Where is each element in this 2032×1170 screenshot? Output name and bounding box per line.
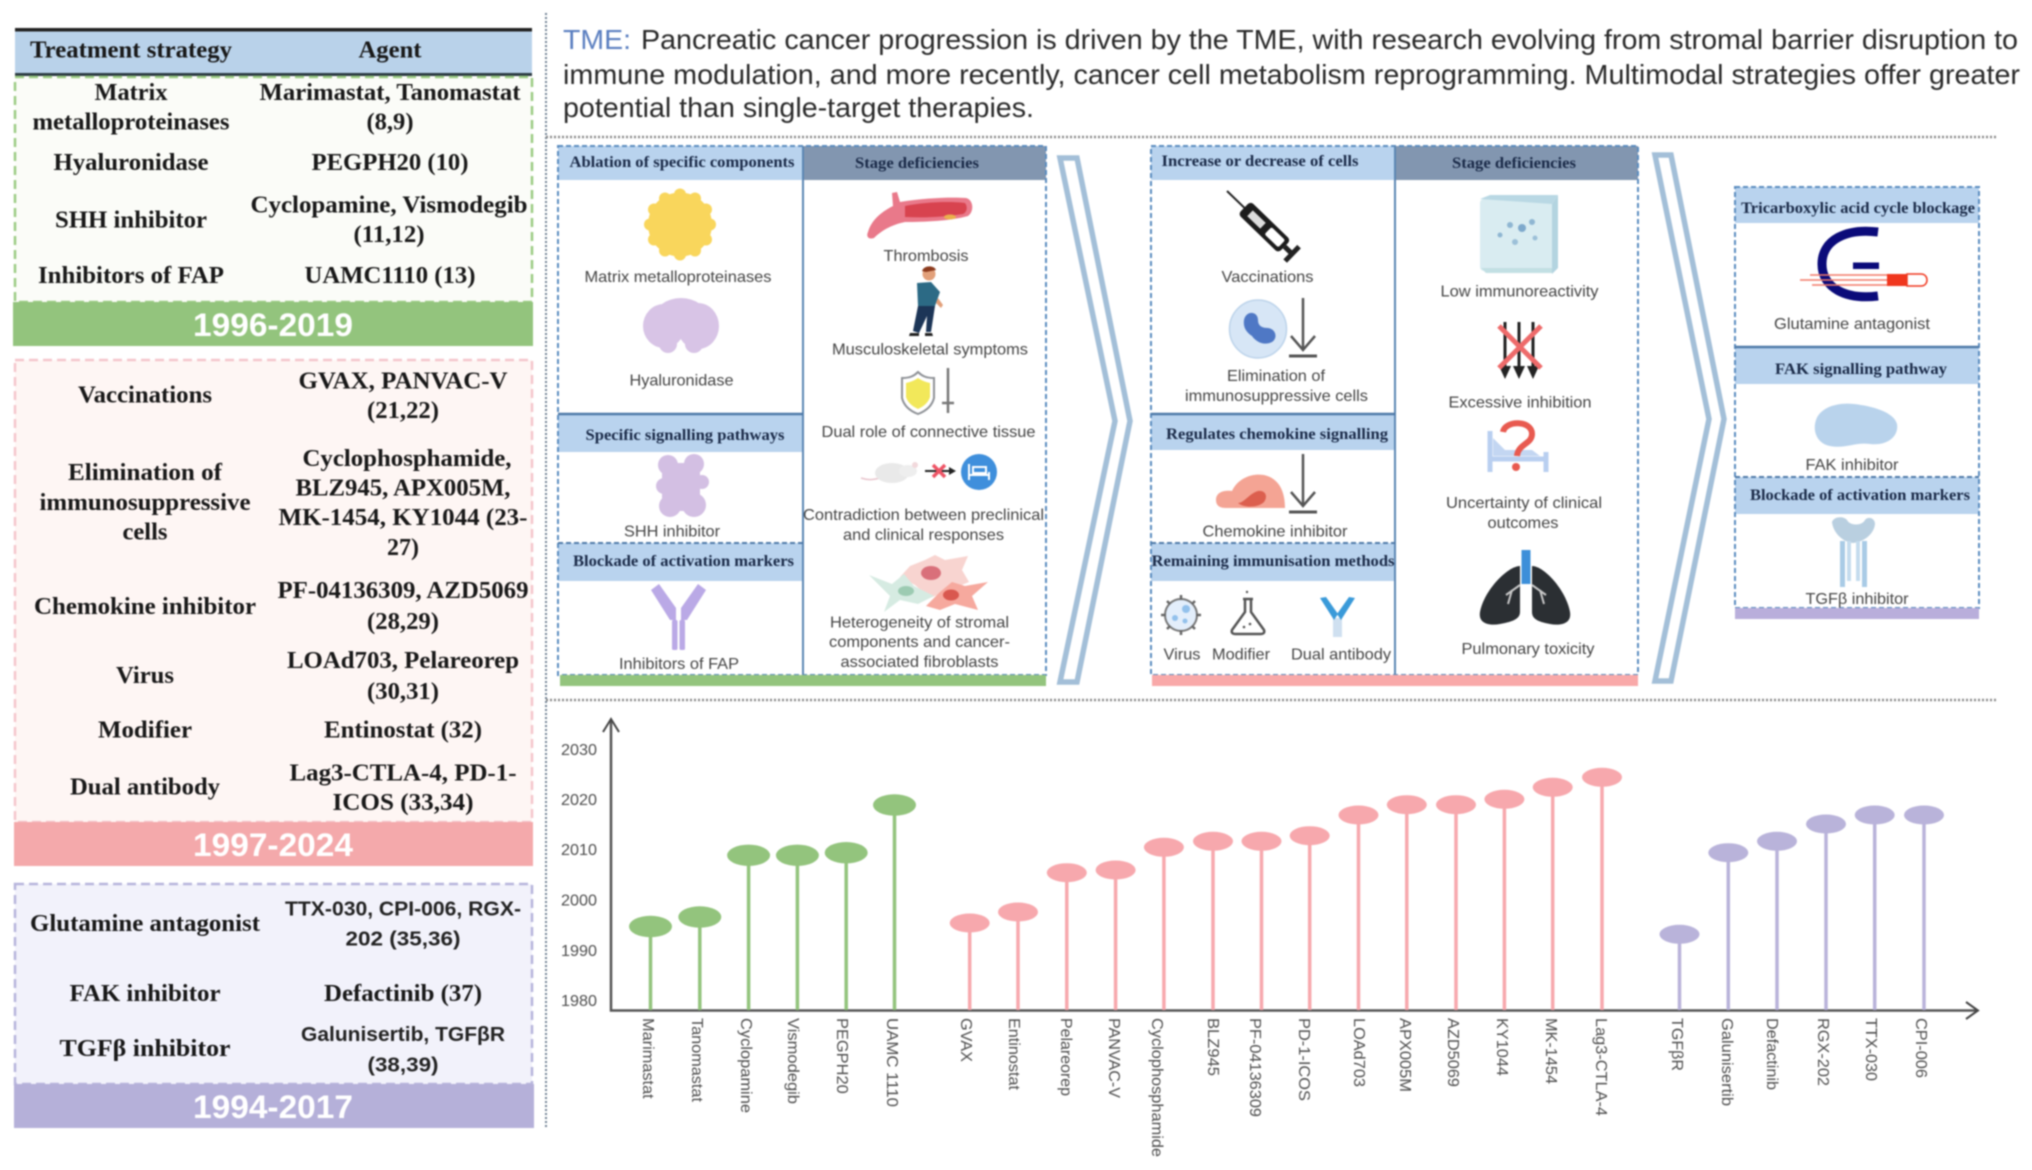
label: elimination of immunosuppressive cells: Elimination of — [1227, 368, 1326, 385]
header: increase or decrease of cells — [1151, 146, 1395, 180]
header: blockade of activation markers — [1735, 477, 1979, 514]
label: musculoskeletal symptoms: Musculoskeletal symptoms — [832, 342, 1028, 358]
panel: immune strategies 1997-2024: BLZ945, APX005M, — [296, 474, 510, 502]
label: elimination of immunosuppressive cells — [1185, 368, 1368, 405]
icon: man with musculoskeletal pain — [909, 266, 943, 336]
drug name labels: PF-04136309 — [1246, 1018, 1263, 1117]
label: elimination of immunosuppressive cells: immunosuppressive cells — [1185, 388, 1368, 405]
era bar 1996-2019 — [13, 302, 533, 346]
icon: shield and sword — [902, 368, 954, 414]
drug name labels: MK-1454 — [1542, 1018, 1559, 1084]
icon: virus — [1161, 595, 1201, 635]
table header: Treatment strategy — [30, 36, 233, 64]
panel: immune strategies 1997-2024: GVAX, PANVAC-V — [298, 368, 508, 394]
drug name labels: PANVAC-V — [1105, 1018, 1122, 1099]
header: stage deficiencies — [804, 146, 1046, 180]
panel: immune strategies 1997-2024: Cyclophosphamide, — [302, 445, 512, 472]
panel: metabolic strategies 1994-2017: TGFβ inhibitor — [60, 1035, 231, 1062]
icon: ice cube — [1480, 195, 1558, 274]
year axis labels: 1990 — [561, 943, 597, 960]
label: dual role of connective tissue: Dual role of connective tissue — [822, 424, 1036, 441]
panel: immune strategies 1997-2024: (28,29) — [367, 608, 439, 635]
header: tricarboxylic acid cycle blockage — [1735, 187, 1979, 223]
label: chemokine inhibitor: Chemokine inhibitor — [1202, 524, 1348, 540]
label: FAK inhibitor: FAK inhibitor — [1806, 457, 1899, 474]
label: uncertainty of clinical outcomes: outcomes — [1488, 515, 1558, 532]
drug name labels: RGX-202 — [1814, 1018, 1831, 1086]
panel: metabolic strategies 1994-2017: FAK inhibitor — [70, 980, 221, 1007]
icon: mouse to patient contradiction — [861, 454, 997, 490]
panel: immune strategies 1997-2024: 27) — [387, 534, 419, 561]
header: ablation of specific components: Ablation of specific components — [570, 154, 794, 171]
panel: immune strategies 1997-2024: Modifier — [98, 716, 192, 744]
era bar 1994-2017 — [14, 1084, 534, 1128]
era bar 1997-2024 — [14, 822, 533, 866]
panel: immune strategies 1997-2024: Elimination of — [68, 459, 223, 486]
panel: immune strategies 1997-2024: immunosuppressive — [40, 489, 251, 516]
panel: metabolic strategies 1994-2017: Defactinib (37) — [324, 980, 482, 1007]
panel: stromal strategies 1996-2019: (8,9) — [366, 108, 414, 136]
TME summary text: potential than single-target therapies. — [563, 92, 1034, 123]
drug name labels: UAMC 1110 — [883, 1018, 900, 1107]
label: glutamine antagonist: Glutamine antagonist — [1774, 316, 1931, 333]
drug name labels: Lag3-CTLA-4 — [1592, 1018, 1609, 1116]
header: blockade of activation markers: Blockade of activation markers — [573, 553, 794, 570]
panel: metabolic strategies 1994-2017: Glutamine antagonist — [30, 910, 261, 937]
header: specific signalling pathways: Specific signalling pathways — [586, 427, 784, 444]
header: stage deficiencies: Stage deficiencies — [855, 155, 979, 172]
table header — [15, 28, 532, 76]
panel: immune modulation stage — [1151, 146, 1638, 675]
panel: stromal strategies 1996-2019: Hyaluronidase — [54, 149, 209, 176]
label: matrix metalloproteinases: Matrix metalloproteinases — [584, 269, 772, 286]
drug name labels: PD-1-ICOS — [1295, 1018, 1312, 1101]
panel: metabolism stage — [1735, 187, 1979, 608]
header: blockade of activation markers — [558, 543, 803, 581]
TME summary text: immune modulation, and more recently, cancer cell metabolism reprogramming. Multimodal strategies offer greater — [563, 59, 2020, 90]
panel: stromal strategies 1996-2019: Inhibitors of FAP — [38, 262, 224, 289]
panel: metabolic strategies 1994-2017: Galunisertib, TGFβR — [301, 1024, 506, 1046]
panel: stromal strategies 1996-2019: Matrix — [94, 79, 168, 106]
drug name labels: GVAX — [957, 1018, 974, 1063]
header: FAK signalling pathway: FAK signalling pathway — [1775, 361, 1947, 378]
TME summary text: TME: — [563, 24, 631, 55]
year axis labels: 1980 — [561, 993, 597, 1010]
drug name labels — [639, 1018, 1929, 1157]
drug name labels: Tanomastat — [688, 1018, 705, 1103]
drug name labels: Pelareorep — [1057, 1018, 1074, 1096]
header: specific signalling pathways — [558, 414, 803, 452]
panel: immune strategies 1997-2024: (30,31) — [367, 678, 439, 705]
label: uncertainty of clinical outcomes — [1446, 495, 1602, 532]
label: uncertainty of clinical outcomes: Uncertainty of clinical — [1446, 495, 1602, 512]
label: modifier: Modifier — [1212, 646, 1271, 664]
header: blockade of activation markers: Blockade of activation markers — [1750, 487, 1970, 504]
label: TGF-beta inhibitor: TGFβ inhibitor — [1806, 591, 1909, 608]
panel: stromal strategies 1996-2019: Marimastat, Tanomastat — [260, 79, 521, 106]
drug name labels: Galunisertib — [1718, 1018, 1735, 1106]
label: inhibitors of FAP: Inhibitors of FAP — [619, 656, 739, 673]
icon: flask — [1232, 591, 1264, 634]
icon: hyaluronidase — [643, 298, 719, 353]
panel: immune strategies 1997-2024 — [15, 360, 532, 822]
drug name labels: Entinostat — [1005, 1018, 1022, 1091]
icon: SHH inhibitor — [656, 454, 709, 517]
stage colour bar: metabolism — [1735, 608, 1979, 619]
label: excessive inhibition: Excessive inhibition — [1448, 394, 1592, 412]
era bar 1994-2017: 1994-2017 — [193, 1089, 353, 1125]
panel: stromal strategies 1996-2019: (11,12) — [354, 221, 424, 248]
drug name labels: KY1044 — [1493, 1018, 1510, 1076]
drug name labels: APX005M — [1396, 1018, 1413, 1092]
drug name labels: BLZ945 — [1204, 1018, 1221, 1076]
year axis labels: 2010 — [561, 842, 597, 859]
icon: thrombosis vessel — [867, 192, 972, 239]
panel: immune strategies 1997-2024: Virus — [116, 662, 174, 689]
panel: immune strategies 1997-2024: Chemokine inhibitor — [34, 593, 256, 620]
TME summary text: Pancreatic cancer progression is driven by the TME, with research evolving from stromal barrier disruption to — [641, 24, 2018, 55]
icon: glutamine antagonist — [1800, 231, 1927, 297]
header: regulates chemokine signalling: Regulates chemokine signalling — [1166, 426, 1388, 443]
header: remaining immunisation methods: Remaining immunisation methods — [1152, 553, 1394, 570]
drug name labels: AZD5069 — [1444, 1018, 1461, 1087]
drug name labels: Cyclopamine — [737, 1018, 754, 1113]
pink immune lollipops — [950, 768, 1622, 1010]
label: dual antibody: Dual antibody — [1291, 646, 1391, 664]
year axis labels: 2000 — [561, 892, 597, 910]
icon: FAP antibody — [651, 584, 706, 650]
panel: stromal strategies 1996-2019: SHH inhibitor — [55, 206, 207, 234]
label: contradiction between preclinical and clinical responses: Contradiction between preclinical — [803, 507, 1044, 524]
panel: stromal strategies 1996-2019: UAMC1110 (13) — [304, 262, 476, 289]
year axis labels: 2020 — [561, 792, 597, 809]
panel: stromal strategies 1996-2019: metalloproteinases — [32, 108, 230, 136]
panel: metabolic strategies 1994-2017: TTX-030, CPI-006, RGX- — [285, 898, 521, 920]
icon: lungs — [1480, 550, 1570, 625]
icon: FAK blob — [1815, 404, 1897, 447]
icon: chemokine cell with down arrow — [1216, 454, 1317, 512]
panel: stromal strategies 1996-2019: PEGPH20 (10) — [312, 149, 468, 176]
panel: immune strategies 1997-2024: LOAd703, Pelareorep — [287, 647, 519, 674]
era bar 1996-2019: 1996-2019 — [193, 307, 353, 343]
panel: stromal barrier stage — [558, 146, 1046, 675]
panel: immune strategies 1997-2024: (21,22) — [367, 397, 439, 424]
icon: TGF-beta receptor — [1832, 517, 1875, 587]
header: stage deficiencies — [1396, 146, 1638, 180]
panel: immune strategies 1997-2024: ICOS (33,34) — [332, 789, 474, 816]
panel: stromal strategies 1996-2019 — [15, 77, 532, 302]
header: increase or decrease of cells: Increase or decrease of cells — [1162, 153, 1358, 170]
green stromal lollipops — [629, 794, 916, 1010]
header: regulates chemokine signalling — [1151, 414, 1395, 450]
panel: immune strategies 1997-2024: cells — [122, 518, 168, 546]
label: pulmonary toxicity: Pulmonary toxicity — [1462, 641, 1594, 658]
label: heterogeneity of stromal components and cancer-associated fibroblasts: components and cancer- — [829, 634, 1010, 651]
icon: syringe — [1220, 184, 1301, 263]
icon: matrix metalloproteinases — [644, 188, 716, 260]
purple metabolic lollipops — [1660, 806, 1944, 1010]
table header: Agent — [358, 36, 422, 64]
icon: immunosuppressive cell with down arrow — [1230, 298, 1317, 358]
era bar 1997-2024: 1997-2024 — [193, 827, 353, 863]
header: ablation of specific components — [558, 146, 803, 180]
drug name labels: Cyclophosphamide — [1148, 1018, 1165, 1157]
left treatment table — [13, 28, 534, 1128]
timeline lollipop chart — [561, 719, 1978, 1157]
label: vaccinations: Vaccinations — [1222, 269, 1314, 286]
icon: bed with question mark — [1490, 423, 1546, 472]
panel: immune strategies 1997-2024: PF-04136309, AZD5069 — [278, 577, 528, 604]
label: contradiction between preclinical and clinical responses — [803, 507, 1044, 544]
panel: immune strategies 1997-2024: Entinostat (32) — [324, 716, 482, 744]
header: tricarboxylic acid cycle blockage: Tricarboxylic acid cycle blockage — [1741, 200, 1975, 217]
header: remaining immunisation methods — [1151, 543, 1395, 581]
year axis labels — [561, 742, 597, 1010]
icon: heterogeneous fibroblasts — [869, 555, 988, 612]
stage colour bar: stromal — [560, 675, 1046, 686]
drug name labels: LOAd703 — [1350, 1018, 1367, 1087]
drug name labels: PEGPH20 — [833, 1018, 850, 1094]
label: hyaluronidase: Hyaluronidase — [630, 372, 734, 390]
panel: metabolic strategies 1994-2017: (38,39) — [368, 1054, 438, 1076]
year axis labels: 2030 — [561, 742, 597, 759]
label: thrombosis: Thrombosis — [884, 248, 968, 265]
drug name labels: Marimastat — [639, 1018, 656, 1099]
header: FAK signalling pathway — [1735, 347, 1979, 384]
arrow: chevron to immune stage — [1060, 158, 1130, 682]
panel: immune strategies 1997-2024: Lag3-CTLA-4, PD-1- — [290, 760, 516, 786]
icon: dual antibody — [1320, 597, 1355, 637]
label: heterogeneity of stromal components and cancer-associated fibroblasts — [829, 614, 1010, 671]
panel: immune strategies 1997-2024: MK-1454, KY1044 (23- — [278, 504, 528, 531]
arrow: chevron to metabolic stage — [1655, 155, 1724, 681]
label: low immunoreactivity: Low immunoreactivity — [1440, 284, 1598, 300]
label: SHH inhibitor: SHH inhibitor — [624, 524, 721, 540]
label: virus: Virus — [1164, 646, 1200, 664]
panel: metabolic strategies 1994-2017: 202 (35,36) — [346, 928, 460, 950]
drug name labels: Vismodegib — [784, 1018, 801, 1104]
drug name labels: TGFβR — [1668, 1018, 1685, 1071]
label: heterogeneity of stromal components and cancer-associated fibroblasts: associated fibroblasts — [840, 654, 998, 671]
panel: metabolic strategies 1994-2017 — [15, 884, 532, 1084]
chart axes — [603, 719, 1978, 1019]
label: contradiction between preclinical and clinical responses: and clinical responses — [843, 527, 1004, 544]
panel: immune strategies 1997-2024: Dual antibody — [70, 774, 221, 800]
icon: excessive inhibition — [1499, 322, 1541, 379]
drug name labels: TTX-030 — [1862, 1018, 1879, 1081]
TME summary text — [563, 24, 2020, 123]
panel: stromal strategies 1996-2019: Cyclopamine, Vismodegib — [250, 192, 528, 218]
label: heterogeneity of stromal components and cancer-associated fibroblasts: Heterogeneity of stromal — [830, 614, 1009, 632]
drug name labels: CPI-006 — [1912, 1018, 1929, 1078]
drug name labels: Defactinib — [1763, 1018, 1780, 1090]
stage colour bar: immune — [1152, 675, 1638, 686]
panel: immune strategies 1997-2024: Vaccinations — [78, 382, 212, 408]
header: stage deficiencies: Stage deficiencies — [1452, 155, 1576, 172]
